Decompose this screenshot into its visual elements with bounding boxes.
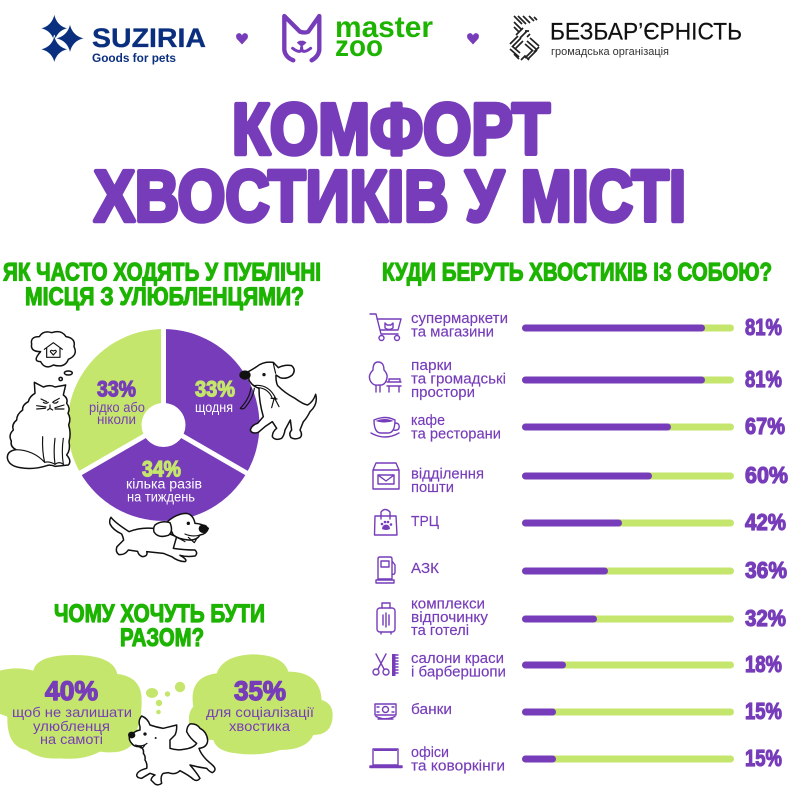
row: malls <box>374 509 786 535</box>
title: КОМФОРТ <box>232 90 550 170</box>
row: gas stations: 36% <box>745 557 787 583</box>
illustration: running dog <box>110 513 208 562</box>
row: supermarkets <box>370 311 782 340</box>
heading: why together <box>54 600 265 652</box>
row: parks: та громадські <box>411 372 506 388</box>
row: parks: парки <box>411 358 452 374</box>
row: cafes: 67% <box>745 413 785 439</box>
row: resorts and hotels: комплекси <box>411 596 485 612</box>
cloud: 40% reason: улюбленця <box>33 718 110 734</box>
row: post offices: відділення <box>411 466 484 482</box>
row: supermarkets: 81% <box>745 314 782 340</box>
row: resorts and hotels: та готелі <box>411 623 469 639</box>
row: banks <box>375 698 782 724</box>
row: supermarkets: та магазини <box>411 324 494 340</box>
illustration: cat with thought bubble <box>7 332 75 468</box>
title: ХВОСТИКІВ У МІСТІ <box>94 157 686 237</box>
illustration: fluffy dog <box>128 716 215 785</box>
heading: why together: РАЗОМ? <box>120 624 204 652</box>
title <box>94 90 686 237</box>
cloud: 40% reason: щоб не залишати <box>12 704 132 720</box>
logo: master zoo: master <box>335 11 433 44</box>
donut chart: 33% <box>195 376 235 402</box>
logo: Bezbar'ernist: громадська організація <box>551 46 669 58</box>
donut chart: на тиждень <box>127 490 195 504</box>
row: gas stations <box>376 557 787 583</box>
row: banks: 15% <box>745 698 782 724</box>
row: resorts and hotels: 32% <box>745 605 786 631</box>
decorative thought dots <box>146 682 185 714</box>
cloud: 35% reason: 35% <box>234 676 286 706</box>
logo: master zoo: zoo <box>335 30 383 63</box>
donut chart: 34% <box>142 456 181 482</box>
heading: how often: МІСЦЯ З УЛЮБЛЕНЦЯМИ? <box>25 283 304 311</box>
icon: heart divider right <box>467 33 479 44</box>
illustration: dog with leash <box>239 362 316 439</box>
cloud: 40% reason <box>0 655 142 759</box>
row: gas stations: АЗК <box>411 561 440 577</box>
donut chart: ніколи <box>97 412 136 427</box>
row: parks <box>369 358 782 401</box>
donut chart <box>68 325 259 521</box>
cloud: 40% reason: на самоті <box>40 731 103 747</box>
row: banks: банки <box>411 702 452 718</box>
cloud: 35% reason <box>189 654 333 754</box>
donut chart: щодня <box>195 400 233 415</box>
row: post offices: 60% <box>745 462 788 488</box>
row: cafes <box>371 413 785 442</box>
heading: how often: ЯК ЧАСТО ХОДЯТЬ У ПУБЛІЧНІ <box>3 258 321 286</box>
row: salons and barbershops: і барбершопи <box>411 664 506 680</box>
row: parks: простори <box>411 385 475 401</box>
row: malls: 42% <box>745 509 786 535</box>
row: salons and barbershops: 18% <box>745 651 782 677</box>
logo: Bezbar'ernist <box>510 16 742 60</box>
donut chart: 33% <box>97 376 136 402</box>
logo: Suziria: SUZIRIA <box>92 23 206 53</box>
row: salons and barbershops <box>373 651 782 680</box>
row: offices and coworkings: офіси <box>411 745 449 761</box>
row: salons and barbershops: салони краси <box>411 651 504 667</box>
row: offices and coworkings: 15% <box>745 745 782 771</box>
row: resorts and hotels <box>377 596 786 639</box>
row: offices and coworkings: та коворкінги <box>411 758 505 774</box>
row: cafes: та ресторани <box>411 426 501 442</box>
donut chart: кілька разів <box>126 476 202 492</box>
row: cafes: кафе <box>411 413 445 429</box>
row: resorts and hotels: відпочинку <box>411 610 489 626</box>
row: supermarkets: супермаркети <box>411 311 508 327</box>
logo: Suziria: Goods for pets <box>92 53 176 65</box>
heading: why together: ЧОМУ ХОЧУТЬ БУТИ <box>54 600 265 628</box>
cloud: 40% reason: 40% <box>45 676 98 706</box>
cloud: 35% reason: хвостика <box>229 718 290 734</box>
logo: Bezbar'ernist: БЕЗБАР’ЄРНІСТЬ <box>550 18 742 46</box>
cloud: 35% reason: для соціалізації <box>206 704 314 720</box>
row: parks: 81% <box>745 366 782 392</box>
logo: master zoo <box>284 11 433 63</box>
row: post offices <box>373 462 788 496</box>
donut chart: рідко або <box>89 400 145 415</box>
list: places with bars <box>369 311 788 774</box>
heading: how often <box>3 258 321 311</box>
icon: heart divider left <box>236 33 248 44</box>
logo: Suziria <box>40 13 206 65</box>
row: malls: ТРЦ <box>411 514 439 530</box>
row: post offices: пошти <box>411 480 454 496</box>
row: offices and coworkings <box>370 745 782 774</box>
